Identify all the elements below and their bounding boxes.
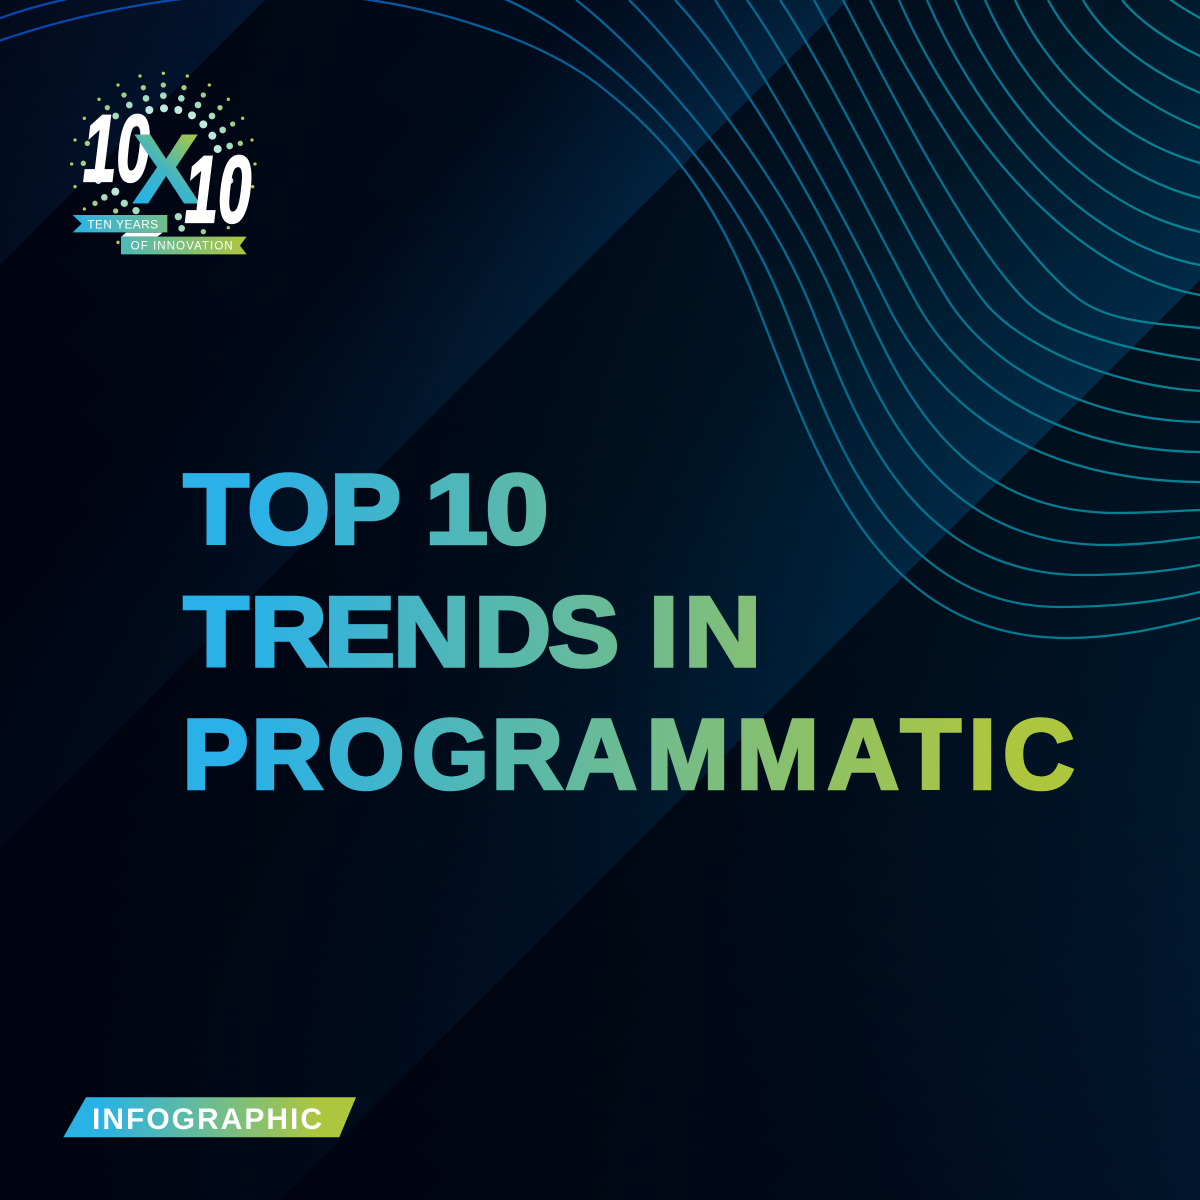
wave line pattern [0,0,1200,638]
ribbon: of innovation: OF INNOVATION [131,240,233,253]
logo burst dots [70,72,257,244]
title: top 10 trends in programmatic: TOP [184,454,401,565]
title: top 10 trends in programmatic: PROGRAMMATIC [182,699,1074,810]
ribbon fold [121,233,163,237]
title: top 10 trends in programmatic: TRENDS IN [184,577,761,687]
ribbon: of innovation [121,237,247,254]
logo numeral: left 10: 10 [83,96,150,202]
title: top 10 trends in programmatic: 10 [425,454,549,565]
logo numeral: right 10: 10 [185,137,251,243]
title: top 10 trends in programmatic [182,454,1074,810]
ribbon: ten years: TEN YEARS [87,218,158,231]
badge: infographic: INFOGRAPHIC [92,1103,322,1136]
logo: 10X10 ten years of innovation [70,72,257,254]
ribbon: ten years [73,215,167,232]
logo letter: X: X [131,113,201,225]
badge: infographic [63,1097,356,1137]
